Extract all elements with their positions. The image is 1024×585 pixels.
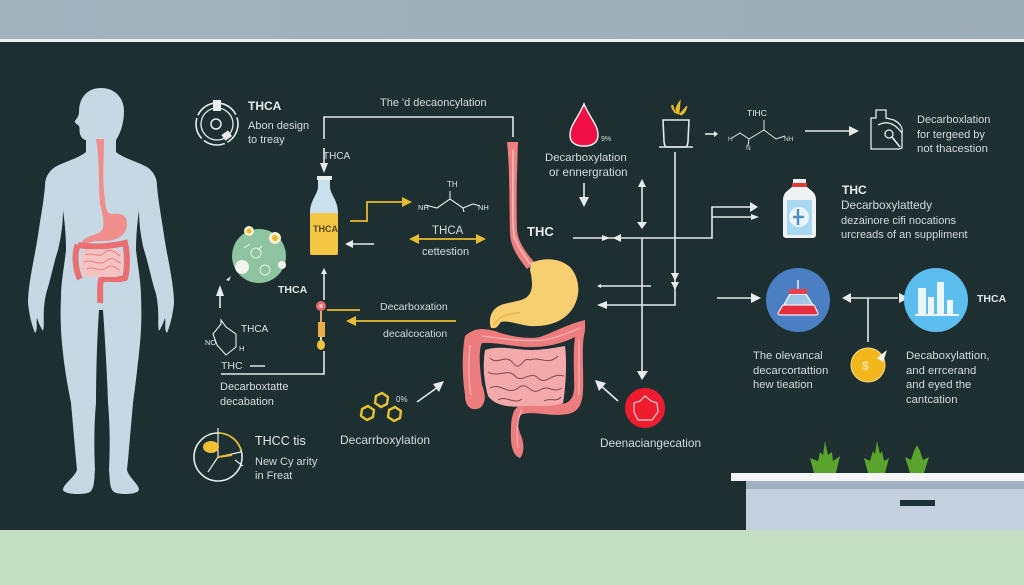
molecule: THC chain: H	[728, 136, 733, 143]
counter	[731, 473, 1024, 530]
text: or energration: or ennergration	[549, 166, 628, 179]
top connector with label: The 'd decaoncylation	[380, 97, 487, 109]
text: The olevancal	[753, 350, 828, 391]
text: The olevancal: The olevancal	[753, 350, 823, 362]
text: THCA Abon design: THCA	[248, 99, 282, 113]
vertical line down to red badge	[641, 238, 643, 372]
icon: clock circle	[194, 428, 243, 481]
molecule: THCA ring: NO	[205, 338, 216, 347]
double label and yellow arrow: decarboxation: decalcocation	[383, 328, 447, 340]
molecule: THC chain: TIHC	[747, 108, 767, 118]
molecule: THCA ring	[205, 320, 269, 355]
THCA double arrow and label: cettestion	[422, 246, 469, 258]
white divider	[0, 39, 1024, 42]
text: Decarboxlation for targeted: for tergeed by	[917, 129, 985, 141]
label: THCA bar chart: THCA	[977, 293, 1007, 305]
arrow: down from drop	[579, 183, 589, 207]
text: THCA Abon design: to treay	[248, 134, 285, 146]
arrow: up to bottle	[321, 268, 327, 300]
icon: yellow rings	[361, 393, 401, 421]
text: Decaboxylation and errcerand: and eyed the	[906, 379, 971, 391]
bottle with THCA: THCA	[313, 224, 338, 234]
text: Decaboxylation and errcerand: cantcation	[906, 394, 958, 406]
molecule: amine	[418, 180, 489, 212]
icon: coin: $	[862, 359, 869, 373]
label: 0%: 0%	[396, 395, 408, 404]
top connector with label	[320, 97, 513, 173]
icon: burner cup with flame	[659, 101, 693, 147]
text: Decarboxtatte: decabation	[220, 396, 274, 408]
large intestine	[463, 320, 585, 458]
icon: green cell	[232, 226, 286, 283]
main horizontal with branch arrows	[573, 207, 752, 238]
text: Decarboxtatte	[220, 381, 288, 408]
text: THCC tis: THCC tis	[255, 434, 306, 448]
icon: gear emblem	[196, 100, 238, 145]
icon: bar chart circle	[904, 268, 968, 332]
molecule: THCA ring: H	[239, 344, 244, 353]
large digestive tract	[463, 142, 585, 458]
molecule: THCA ring: THCA	[241, 324, 269, 335]
icon: padlock magnifier	[871, 110, 902, 149]
human body figure with digestive tract	[28, 88, 174, 494]
bottle with THCA	[310, 176, 338, 255]
arrow: to intestine right	[595, 380, 618, 401]
molecule: amine: NH	[478, 203, 489, 212]
text: Decarboxtatte: Decarboxtatte	[220, 381, 288, 393]
text: THCC tis: in Freat	[255, 470, 292, 482]
text: or energration	[545, 152, 628, 179]
text: THC supplement: THC	[842, 183, 867, 197]
double arrow vertical	[641, 184, 643, 224]
body silhouette	[28, 88, 174, 494]
icon: red badge	[625, 388, 665, 428]
text: THCC tis: New Cy arity	[255, 456, 318, 468]
text: The olevancal: hew tieation	[753, 379, 813, 391]
yellow stepped arrow to molecule	[350, 197, 412, 221]
supplement bottle	[783, 179, 816, 238]
molecule: THC chain	[728, 108, 794, 152]
icon: flask circle	[766, 268, 830, 332]
arrow: molecule to lock	[805, 126, 859, 136]
text: THC with dash	[221, 360, 265, 372]
double label and yellow arrow: decarboxation	[346, 301, 456, 340]
icon: capsule probe	[316, 301, 326, 350]
text: THCC tis	[255, 434, 318, 482]
small esophagus and stomach	[82, 139, 127, 247]
arrow: up to cell	[216, 276, 231, 308]
small intestine	[484, 346, 566, 407]
text: THCA Abon design	[248, 99, 309, 146]
label: THC: THC	[527, 224, 554, 239]
double label and yellow arrow: decarboxation: Decarboxation	[380, 301, 448, 313]
arrow: cup to molecule	[705, 131, 718, 137]
arrow: to flask circle	[717, 293, 761, 303]
small large intestine	[76, 243, 127, 303]
text: THC supplement: urcreads of an suppliment	[841, 229, 968, 241]
connector network	[573, 152, 759, 380]
double arrow between circles with stem	[842, 293, 909, 342]
THCA double arrow and label: THCA	[432, 225, 464, 237]
text: Decaboxylation and errcerand	[906, 350, 990, 406]
molecule: amine: NH	[418, 203, 429, 212]
floor strip	[0, 530, 1024, 585]
icon: blood drop	[570, 104, 611, 146]
stomach	[490, 259, 578, 328]
icon: coin	[851, 348, 887, 382]
text: or energration: Decarboxylation	[545, 152, 627, 164]
text: The olevancal: decarcortattion	[753, 365, 828, 377]
icon: plants on counter	[810, 441, 929, 473]
text: Decarboxlation for targeted: Decarboxlation	[917, 114, 990, 126]
esophagus	[507, 142, 535, 269]
text: THCA Abon design: Abon design	[248, 120, 309, 132]
icon: blood drop: 9%	[601, 136, 611, 143]
text: Decarboxlation for targeted: not thacestion	[917, 143, 988, 155]
text: Decaboxylation and errcerand: and errcerand	[906, 365, 976, 377]
label: Deenaciangecation: Deenaciangecation	[600, 436, 701, 450]
text: Decarboxlation for targeted	[917, 114, 990, 155]
molecule: THC chain: N	[746, 145, 751, 152]
yellow stub line from probe	[327, 309, 360, 311]
top connector with label: THCA	[323, 151, 351, 162]
arrow: to intestine left	[417, 381, 444, 402]
arrow: left to bottle	[345, 240, 374, 248]
connector under molecule	[221, 351, 324, 374]
text: THC supplement: dezainore cifi nocations	[841, 215, 956, 227]
molecule: amine: TH	[447, 180, 458, 189]
line from cup turning left at stomach	[605, 152, 675, 305]
label: Decarrboxylation: Decarrboxylation	[340, 433, 430, 447]
THCA double arrow and label	[409, 225, 486, 258]
small small intestine	[81, 249, 123, 277]
top banner	[0, 0, 1024, 40]
text: THC supplement: Decarboxylattedy	[841, 198, 932, 212]
text: Decaboxylation and errcerand: Decaboxylattion,	[906, 350, 990, 362]
label: THCA by cell: THCA	[278, 284, 308, 296]
molecule: THC chain: NH	[784, 136, 794, 143]
arrow down to red icon	[637, 371, 648, 380]
text: THC supplement	[841, 183, 968, 241]
text: THC with dash: THC	[221, 360, 243, 372]
